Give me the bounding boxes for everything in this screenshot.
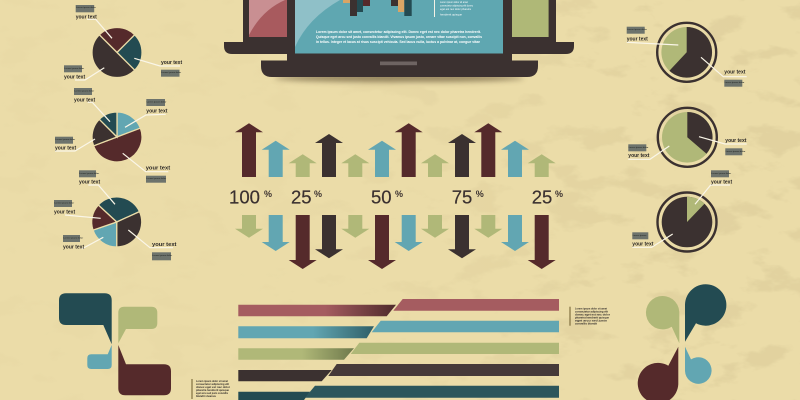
percentage labels: 75 [452, 186, 472, 208]
ring pie chart 2 (right): Lorem ipsum dolor [726, 151, 746, 153]
small text note (bars): donec eget est nec dolor [575, 312, 611, 316]
percentage labels: % [476, 189, 484, 199]
percentage labels: % [555, 189, 563, 199]
pie chart 2 (left): Lorem ipsum dolor [55, 139, 75, 141]
pie chart 2 (left): your text [55, 145, 76, 151]
screen bar chart [343, 0, 412, 16]
screen paragraph: in tellus. Integer et lacus at risus suscipit vehicula. Sed lacus nulla, luctus a pulvinar at, congue vitae [316, 40, 480, 44]
pie chart 3 (left): Lorem ipsum dolor [54, 202, 74, 204]
bar 3: green [238, 343, 559, 360]
ring pie chart 1 (right): your text [627, 37, 648, 43]
pie chart 2 (left): Lorem ipsum dolor [146, 178, 166, 180]
touchpad notch [380, 62, 417, 65]
ring pie chart 1 (right) [627, 23, 747, 87]
percentage labels: % [264, 189, 272, 199]
small text note (bottom left): pharetra hendrerit quisque [196, 388, 229, 392]
screen side note: consectetur adipiscing elit donec [440, 4, 473, 8]
ring pie chart 3 (right): Lorem ipsum [633, 235, 646, 237]
pie chart 1 (left) [64, 5, 182, 81]
pie chart 2 (left): Lorem ipsum dolor [74, 90, 94, 92]
right laptop (green screen) [510, 0, 574, 54]
pie chart 3 (left): Lorem ipsum dolor [152, 255, 172, 257]
small text note (bottom left): eget arcu sed justo convallis [196, 391, 228, 395]
up arrows row [235, 123, 556, 177]
down arrows row [235, 215, 556, 269]
pie chart 1 (left): your text [161, 60, 182, 66]
small text note (bars): eget arcu sed justo [575, 318, 607, 322]
ring pie chart 2 (right): your text [628, 153, 650, 159]
small text note (bars): Lorem ipsum dolor sit amet [575, 306, 607, 310]
pie chart 2 (left): your text [74, 97, 95, 103]
pie chart 3 (left): your text [79, 180, 100, 186]
ring pie chart 2 (right): your text [725, 138, 747, 144]
laptop screen [295, 0, 503, 54]
ring pie chart 3 (right): your text [711, 180, 732, 186]
ring pie chart 3 (right) [632, 170, 732, 252]
ring pie chart 1 (right): your text [724, 69, 746, 75]
shadow under laptop [274, 74, 524, 82]
pie chart 1 (left): Lorem ipsum dolor [64, 68, 84, 70]
small text note (bottom left): Lorem ipsum dolor sit amet [196, 379, 228, 383]
pie chart 2 (left): your text [146, 165, 170, 171]
percentage labels: 100 [229, 186, 260, 208]
pie chart 3 (left): Lorem ipsum dolor [79, 173, 99, 175]
screen side note: Lorem ipsum dolor sit amet [440, 0, 468, 4]
pie chart 1 (left): Lorem ipsum dolor [76, 7, 96, 9]
pie chart 3 (left) [54, 170, 177, 260]
bar 4: dark brown [238, 364, 559, 381]
small text note (bars) [570, 306, 611, 326]
left laptop (red screen) [224, 0, 290, 54]
screen side note: eget est nec dolor pharetra [440, 7, 471, 11]
pie chart 3 (left): Lorem ipsum dolor [63, 238, 83, 240]
pie chart 2 (left): Lorem ipsum dolor [147, 102, 167, 104]
small text note (bottom left): consectetur adipiscing elit [196, 382, 229, 386]
percentage labels: % [395, 189, 403, 199]
laptops illustration [224, 0, 574, 82]
bar 1: red [238, 299, 559, 316]
speech bubbles (left) [59, 293, 171, 395]
ring pie chart 2 (right) [628, 108, 747, 167]
percentage labels [229, 186, 563, 208]
round speech bubbles (right) [638, 284, 726, 400]
pie chart 3 (left): your text [63, 244, 84, 250]
small text note (bottom left): blandit vivamus [196, 394, 216, 398]
percentage labels: % [314, 189, 322, 199]
screen side note: hendrerit quisque [440, 12, 462, 16]
small text note (bottom left) [192, 379, 231, 399]
pie chart 1 (left): your text [64, 75, 85, 81]
ring pie chart 1 (right): Lorem ipsum dolor [725, 82, 745, 84]
ring pie chart 3 (right): your text [632, 241, 654, 247]
ring pie chart 3 (right): Lorem ipsum dolor [711, 173, 731, 175]
main laptop [261, 0, 538, 77]
horizontal step bars [238, 299, 559, 400]
ring pie chart 1 (right): Lorem ipsum dolor [627, 29, 647, 31]
percentage labels: 25 [291, 186, 312, 208]
pie chart 1 (left): your text [76, 14, 97, 20]
pie chart 2 (left): your text [146, 109, 168, 115]
screen paragraph: Quisque eget arcu sed justo convallis blandit. Vivamus ipsum justo, ornare vitae suscipit non, convallis [316, 35, 482, 39]
pie chart 3 (left): your text [152, 242, 177, 248]
screen side note [434, 0, 473, 17]
pie chart 3 (left): your text [54, 209, 75, 215]
pie chart 1 (left): Lorem ipsum dolor [161, 72, 181, 74]
small text note (bars): consectetur adipiscing elit [575, 310, 608, 314]
bar 2: teal [238, 321, 559, 338]
percentage labels: 25 [532, 186, 552, 208]
bar 5: dark teal [238, 386, 559, 400]
screen paragraph [316, 30, 482, 44]
pie chart 2 (left) [55, 88, 170, 183]
small text note (bars): convallis blandit [575, 322, 597, 326]
percentage labels: 50 [371, 186, 392, 208]
screen paragraph: Lorem ipsum dolor sit amet, consectetur adipiscing elit. Donec eget est nec dolor pharetra hendrerit. [316, 30, 481, 34]
ring pie chart 2 (right): Lorem ipsum dolor [629, 147, 649, 149]
small text note (bottom left): donec eget est nec dolor [196, 385, 231, 389]
small text note (bars): pharetra hendrerit quisque [575, 316, 609, 320]
